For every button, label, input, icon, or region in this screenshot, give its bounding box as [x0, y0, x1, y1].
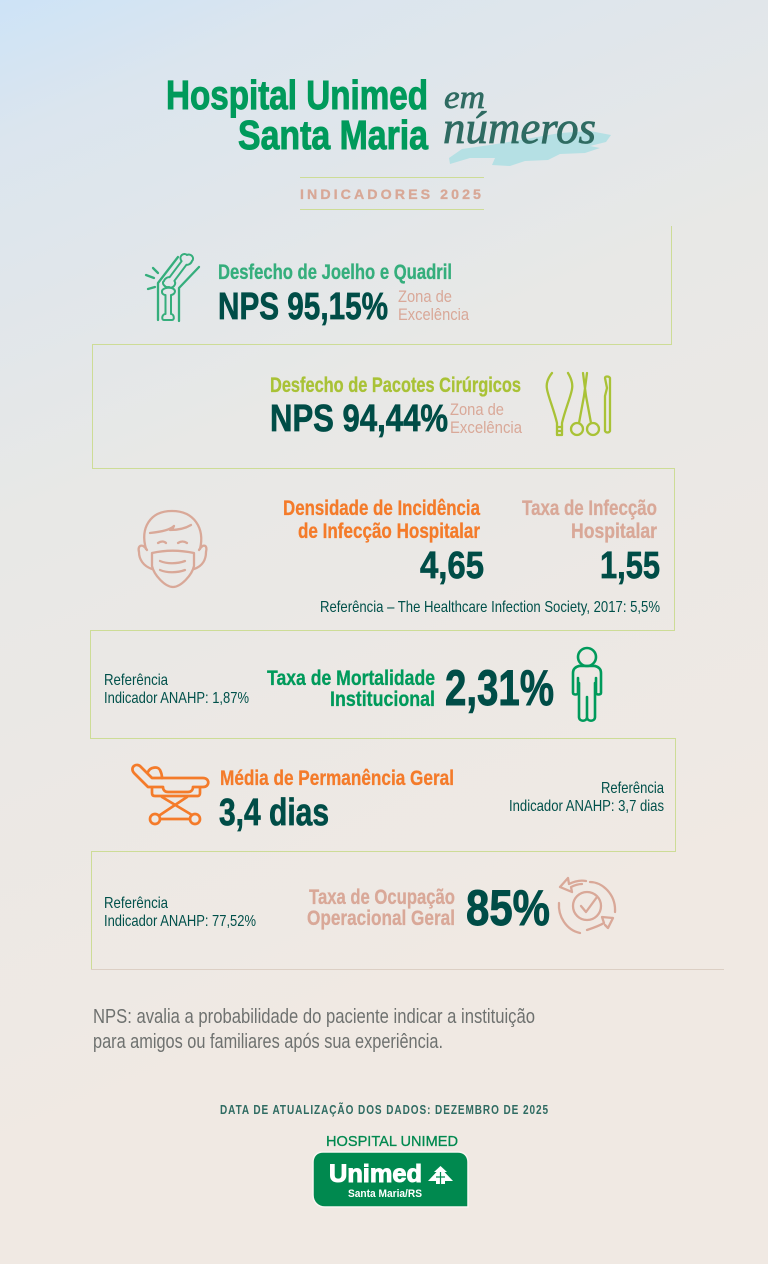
icon: unimed trees: [428, 1166, 453, 1184]
panel: joelho e quadril: NPS 95,15%: [218, 286, 388, 328]
panel: mortalidade: Institucional: [330, 688, 435, 711]
note: definição de NPS: [93, 1006, 535, 1053]
panel: infecção hospitalar: Densidade de Incidência: [283, 497, 480, 520]
icon: surgical tools: [547, 373, 610, 435]
panel: infecção hospitalar: 1,55: [600, 545, 660, 587]
title: Hospital Unimed: [166, 72, 428, 118]
panel: permanência: [91, 738, 676, 852]
icon: cycle check: [559, 878, 615, 933]
subtitle: em números: [443, 80, 596, 153]
subtitle: em números: em: [444, 80, 485, 116]
panel: joelho e quadril: Desfecho de Joelho e Quadril: [218, 261, 452, 284]
logo: hospital unimed: Unimed: [329, 1160, 422, 1188]
data de atualização: DATA DE ATUALIZAÇÃO DOS DADOS: DEZEMBRO DE 2025: [220, 1102, 549, 1117]
panel: infecção hospitalar: 4,65: [420, 545, 484, 587]
panel: infecção hospitalar: de Infecção Hospitalar: [298, 520, 480, 543]
panel: joelho e quadril: [92, 226, 672, 344]
panel: ocupação: Referência: [104, 895, 168, 912]
panel: infecção hospitalar: Hospitalar: [571, 520, 657, 543]
panel: permanência: 3,4 dias: [219, 792, 329, 834]
panel: ocupação: Indicador ANAHP: 77,52%: [104, 913, 256, 930]
logo: hospital unimed: HOSPITAL UNIMED: [326, 1133, 458, 1150]
panel: infecção hospitalar: Taxa de Infecção: [522, 497, 657, 520]
panel: pacotes cirúrgicos: NPS 94,44%: [270, 398, 448, 440]
panel: permanência: Indicador ANAHP: 3,7 dias: [509, 798, 664, 815]
panel: mortalidade: Referência: [104, 672, 168, 689]
panel: joelho e quadril: Excelência: [398, 305, 469, 324]
icon: person: [573, 648, 601, 721]
panel: mortalidade: Indicador ANAHP: 1,87%: [104, 690, 249, 707]
panel: ocupação: 85%: [466, 880, 550, 936]
icon: stretcher: [132, 765, 208, 824]
panel: mortalidade: Taxa de Mortalidade: [267, 667, 435, 690]
panel: pacotes cirúrgicos: Desfecho de Pacotes Cirúrgicos: [270, 374, 521, 397]
panel: joelho e quadril: Zona de: [398, 287, 452, 306]
panel: ocupação: Taxa de Ocupação: [309, 886, 455, 909]
panel: permanência: Média de Permanência Geral: [220, 767, 454, 790]
title: Santa Maria: [238, 112, 429, 158]
note: definição de NPS: NPS: avalia a probabilidade do paciente indicar a instituição: [93, 1006, 535, 1028]
subtitle: em números: números: [443, 102, 596, 153]
panel: pacotes cirúrgicos: [92, 344, 674, 468]
note: definição de NPS: para amigos ou familiares após sua experiência.: [93, 1031, 443, 1053]
panel: mortalidade: 2,31%: [445, 660, 554, 716]
brush stroke behind subtitle: [449, 131, 611, 166]
logo: hospital unimed: [313, 1133, 468, 1207]
title: [166, 72, 429, 158]
icon: face with mask: [139, 511, 206, 587]
panel: infecção hospitalar: Referência – The Healthcare Infection Society, 2017: 5,5%: [320, 599, 660, 616]
heading: indicadores 2025: INDICADORES 2025: [300, 186, 484, 202]
panel: mortalidade: [90, 630, 675, 738]
logo: hospital unimed: Santa Maria/RS: [348, 1188, 422, 1200]
panel: permanência: Referência: [601, 780, 664, 797]
panel: pacotes cirúrgicos: Excelência: [450, 418, 522, 437]
panel: pacotes cirúrgicos: Zona de: [450, 400, 504, 419]
panel: ocupação: [91, 851, 724, 970]
panel: ocupação: Operacional Geral: [307, 907, 455, 930]
icon: knee bones: [146, 254, 199, 321]
panel: infecção hospitalar: [90, 468, 674, 630]
